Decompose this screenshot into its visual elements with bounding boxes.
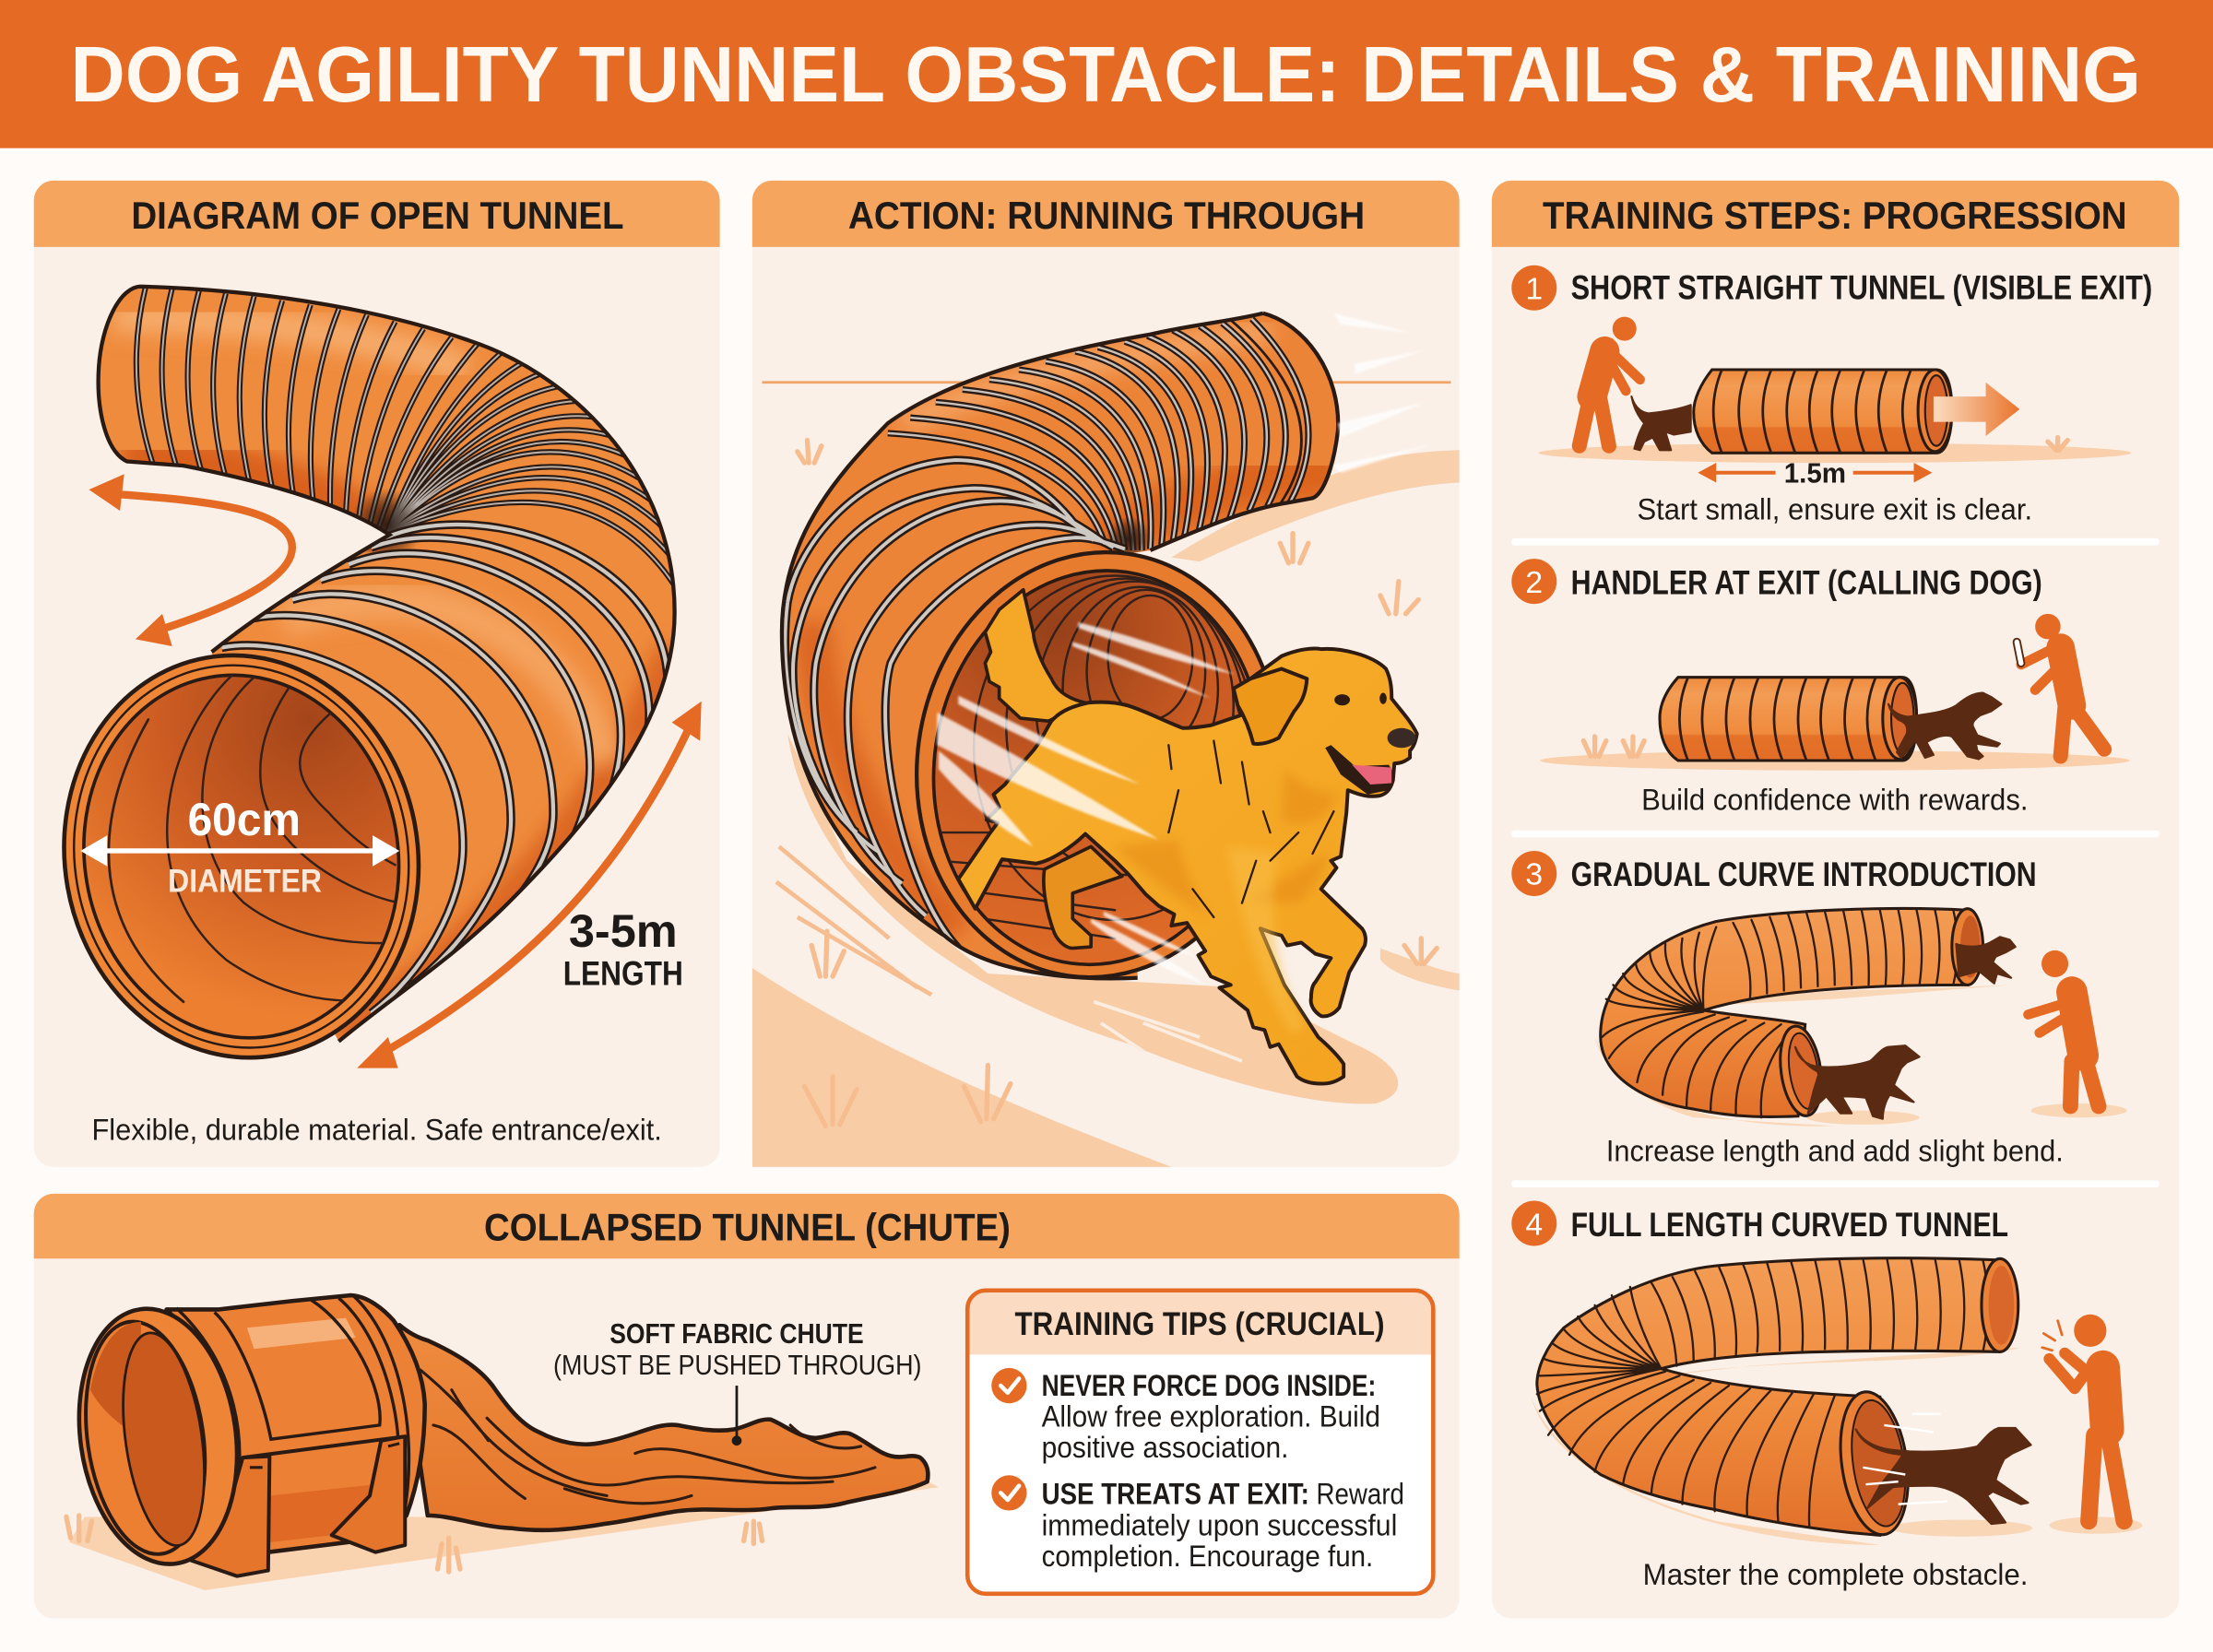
- step 2 badge: 2: [1525, 566, 1543, 600]
- illustration: open tunnel with ribs: [32, 287, 675, 1086]
- diameter measurement: DIAMETER: [168, 863, 322, 899]
- tip 1: [991, 1368, 1380, 1464]
- handler figure: [1580, 317, 1640, 446]
- step 3 badge: [1511, 851, 1556, 896]
- diameter measurement: 60cm: [188, 793, 301, 845]
- panel heading: training steps: [1492, 181, 2179, 247]
- caption step 1: Start small, ensure exit is clear.: [1638, 492, 2032, 525]
- length label: 3-5m: [569, 904, 678, 957]
- direction arrow: [1934, 383, 2019, 436]
- step 2 badge: [1511, 559, 1556, 604]
- panel: training steps progression: [1492, 181, 2179, 1619]
- panel: collapsed tunnel chute: [34, 1194, 1460, 1619]
- dog exiting: [1888, 693, 2001, 759]
- step 3: [1511, 851, 2127, 1168]
- dog at near end: [1795, 1045, 1920, 1119]
- barrel opening: [64, 1299, 253, 1575]
- panel heading: action: [752, 181, 1460, 247]
- step 2: [1511, 559, 2130, 817]
- step 4 title: FULL LENGTH CURVED TUNNEL: [1571, 1206, 2008, 1244]
- title banner: DOG AGILITY TUNNEL OBSTACLE: DETAILS & TRAINING: [71, 30, 2141, 119]
- curved tunnel: [1601, 909, 1983, 1118]
- dog body and head: [958, 649, 1417, 1084]
- dog shading: [1115, 769, 1338, 917]
- long curved tunnel: [1537, 1258, 2018, 1539]
- tip 2: immediately upon successful: [1042, 1508, 1397, 1541]
- label: soft fabric chute: SOFT FABRIC CHUTE: [609, 1318, 864, 1350]
- tip 2: USE TREATS AT EXIT: Reward: [1042, 1478, 1404, 1511]
- dog at far end: [1956, 937, 2016, 984]
- dog ear: [1234, 669, 1307, 744]
- panel heading: action: ACTION: RUNNING THROUGH: [848, 195, 1365, 237]
- illustration: golden retriever running: [958, 590, 1417, 1084]
- panel heading: collapsed: COLLAPSED TUNNEL (CHUTE): [484, 1206, 1011, 1248]
- ground: [1538, 443, 2131, 463]
- short tunnel: [1694, 370, 1952, 453]
- dog mouth and tongue: [1325, 745, 1394, 795]
- caption step 3: Increase length and add slight bend.: [1606, 1135, 2064, 1168]
- step 4 badge: [1511, 1201, 1556, 1246]
- step 1 badge: [1511, 266, 1556, 311]
- dog: [1631, 396, 1691, 450]
- step 3 badge: 3: [1525, 858, 1543, 892]
- ground shadows: [1532, 1348, 2142, 1545]
- label: soft fabric chute: (MUST BE PUSHED THROUGH): [553, 1350, 921, 1381]
- scene: ground and grass: [752, 383, 1460, 1167]
- step 4: [1511, 1201, 2142, 1591]
- panel heading: collapsed: [34, 1194, 1460, 1258]
- panel heading: diagram: [34, 181, 720, 247]
- diameter measurement: [80, 793, 399, 899]
- caption: material: Flexible, durable material. Safe entrance/exit.: [91, 1114, 662, 1147]
- tip 1: positive association.: [1042, 1431, 1288, 1464]
- tip 2: [991, 1475, 1404, 1573]
- step 2 title: HANDLER AT EXIT (CALLING DOG): [1571, 563, 2042, 601]
- illustration: rigid barrel entrance: [64, 1295, 425, 1576]
- barrel stands: [188, 1457, 269, 1576]
- step 1 badge: 1: [1525, 272, 1543, 306]
- ground shadow: [69, 1468, 939, 1590]
- barrel body: [167, 1295, 425, 1559]
- ground: [1540, 750, 2130, 771]
- tip 1: NEVER FORCE DOG INSIDE:: [1042, 1369, 1376, 1402]
- arrow: bendable curve: [89, 474, 292, 646]
- illustration: fabric chute: [399, 1325, 928, 1530]
- handler with treat: [2017, 614, 2104, 756]
- illustration: tunnel seen from front: [782, 313, 1341, 1001]
- panel heading: diagram: DIAGRAM OF OPEN TUNNEL: [131, 195, 624, 237]
- arrow: length: [357, 702, 702, 1068]
- caption step 2: Build confidence with rewards.: [1641, 784, 2028, 817]
- handler clapping: [2042, 1315, 2124, 1521]
- length label: [563, 904, 683, 992]
- step 3 title: GRADUAL CURVE INTRODUCTION: [1571, 856, 2037, 893]
- caption step 4: Master the complete obstacle.: [1643, 1558, 2028, 1591]
- tips heading: TRAINING TIPS (CRUCIAL): [1015, 1306, 1385, 1342]
- handler: [2028, 950, 2099, 1106]
- measure 1.5m: 1.5m: [1784, 457, 1846, 489]
- panel: action running through: [752, 181, 1460, 1167]
- dog far rear leg: [1044, 846, 1122, 949]
- tip 2: completion. Encourage fun.: [1042, 1540, 1373, 1573]
- length label: LENGTH: [563, 954, 683, 992]
- tip 1: Allow free exploration. Build: [1042, 1399, 1380, 1433]
- ground shadows: [1595, 985, 2127, 1127]
- title banner: [0, 0, 2213, 148]
- motion streaks: [937, 313, 1433, 985]
- measure 1.5m: [1698, 457, 1932, 489]
- panel: diagram of open tunnel: [32, 181, 720, 1167]
- panel heading: training steps: TRAINING STEPS: PROGRESSION: [1543, 195, 2127, 237]
- label: soft fabric chute: [553, 1318, 921, 1446]
- callout: training tips: [967, 1291, 1433, 1594]
- tunnel: [1660, 678, 1917, 761]
- running dog: [1856, 1428, 2031, 1524]
- step 1: [1511, 266, 2152, 525]
- dog face details: [1168, 693, 1415, 917]
- dog tail: [985, 590, 1085, 721]
- step 4 badge: 4: [1525, 1208, 1543, 1242]
